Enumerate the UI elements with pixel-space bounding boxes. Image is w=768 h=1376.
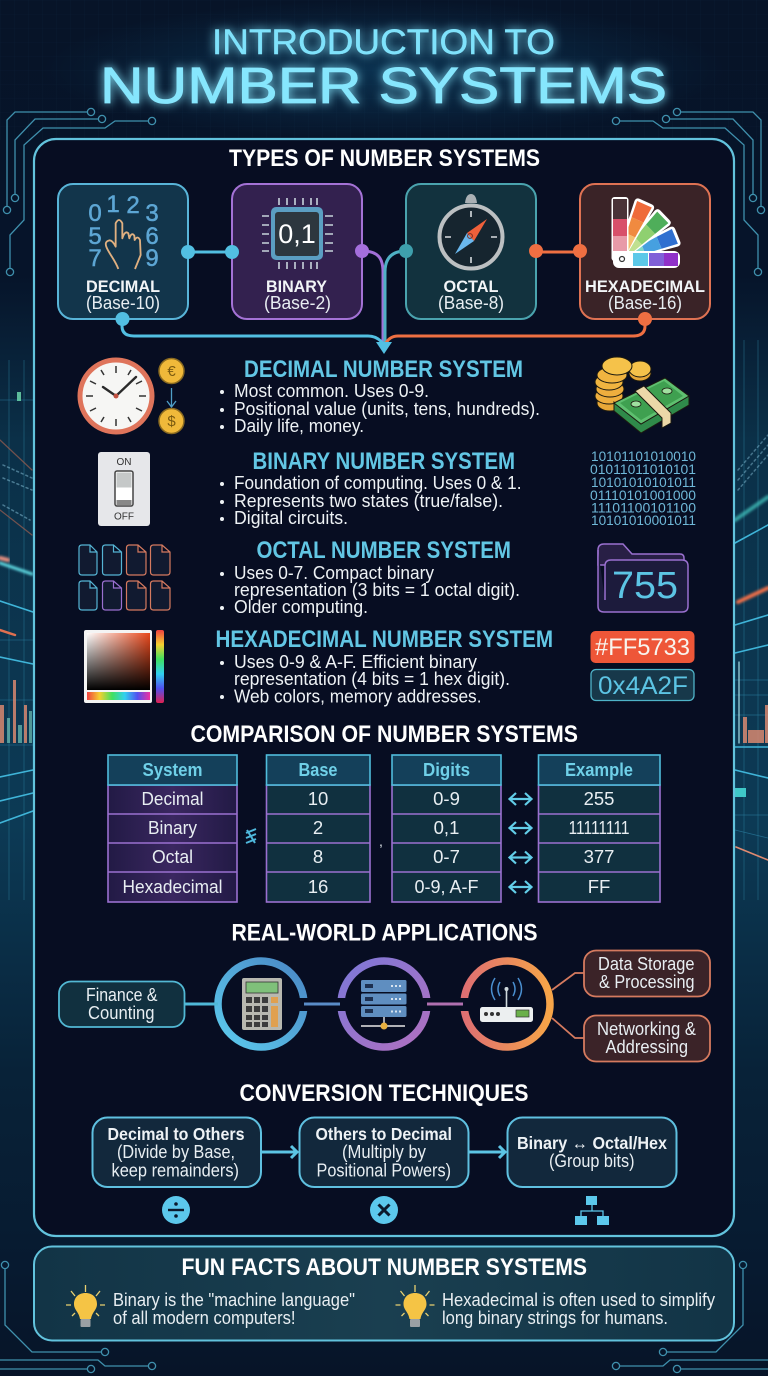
tag: hex colour: #FF5733 bbox=[595, 634, 690, 661]
column: system: Octal bbox=[152, 846, 193, 867]
binary digits block: 10101010101011 bbox=[591, 475, 696, 490]
column: system: Binary bbox=[148, 817, 198, 838]
column: digits: 0-9 bbox=[433, 788, 460, 809]
heading: applications: REAL-WORLD APPLICATIONS bbox=[232, 920, 538, 946]
arrow: step two bbox=[469, 1146, 505, 1158]
connectors: rings and labels bbox=[184, 1002, 463, 1006]
column: system: Hexadecimal bbox=[122, 876, 222, 897]
comma mark: , bbox=[379, 833, 383, 849]
icon: light bulb bbox=[66, 1285, 105, 1327]
title: INTRODUCTION TO bbox=[212, 23, 555, 62]
icon: multiply bbox=[370, 1196, 398, 1224]
column: base: Base bbox=[298, 759, 338, 780]
label: networking: Addressing bbox=[606, 1037, 688, 1057]
conversion flow bbox=[92, 1118, 676, 1225]
section: hexadecimal bbox=[216, 626, 553, 706]
box: others to decimal: Others to Decimal bbox=[316, 1124, 452, 1144]
digits: 9 bbox=[145, 245, 159, 272]
section: binary bbox=[220, 448, 522, 528]
icon: compass bbox=[440, 194, 502, 268]
icon: divide bbox=[162, 1196, 190, 1224]
icon: clock and coins: € bbox=[167, 363, 176, 380]
column: system: Decimal bbox=[142, 788, 204, 809]
section: hexadecimal: HEXADECIMAL NUMBER SYSTEM bbox=[216, 626, 553, 653]
section: binary: Represents two states (true/false). bbox=[234, 490, 503, 511]
icon: on/off switch: OFF bbox=[114, 512, 134, 522]
section: binary: Foundation of computing. Uses 0 & 1. bbox=[234, 472, 522, 493]
fact: binary bbox=[113, 1290, 355, 1328]
box: binary octal hex: (Group bits) bbox=[549, 1151, 634, 1171]
heading: conversion: CONVERSION TECHNIQUES bbox=[240, 1080, 528, 1107]
section: binary: Digital circuits. bbox=[234, 507, 348, 528]
section: binary: BINARY NUMBER SYSTEM bbox=[252, 448, 515, 475]
arrow: down to details bbox=[376, 342, 392, 354]
label: data storage: & Processing bbox=[599, 972, 694, 992]
digits: 5 bbox=[88, 223, 102, 250]
fact: binary: Binary is the "machine language" bbox=[113, 1290, 355, 1310]
section: decimal: Daily life, money. bbox=[234, 415, 364, 436]
binary digits block: 10101101010010 bbox=[591, 449, 696, 464]
icon: coins and cash bbox=[595, 357, 689, 433]
icon: on/off switch bbox=[98, 452, 150, 526]
column: digits: Digits bbox=[423, 759, 470, 780]
digits: 7 bbox=[88, 245, 102, 272]
card: hexadecimal bbox=[580, 184, 710, 319]
binary digits block: 01011011010101 bbox=[590, 462, 696, 477]
label: data storage: Data Storage bbox=[598, 954, 694, 974]
binary digits block: 01110101001000 bbox=[590, 488, 696, 503]
column: example: 377 bbox=[584, 846, 614, 867]
box: others to decimal: (Multiply by bbox=[342, 1142, 426, 1162]
ring: servers bbox=[334, 961, 435, 1047]
column: example: FF bbox=[588, 876, 610, 897]
icon: folder 755 bbox=[598, 544, 688, 612]
digits: 6 bbox=[145, 223, 159, 250]
digits: 0 bbox=[88, 200, 102, 227]
card: binary: BINARY bbox=[266, 277, 328, 296]
digits: 1 bbox=[106, 191, 120, 218]
section: decimal: DECIMAL NUMBER SYSTEM bbox=[244, 356, 523, 383]
section: octal: OCTAL NUMBER SYSTEM bbox=[256, 537, 511, 564]
column: system bbox=[108, 755, 237, 902]
card: binary: (Base-2) bbox=[264, 293, 331, 313]
card: hexadecimal: (Base-16) bbox=[608, 293, 682, 313]
icon: pointing hand bbox=[106, 220, 141, 269]
section: octal bbox=[220, 537, 520, 617]
icon: colour picker bbox=[84, 630, 164, 703]
box: decimal to others: Decimal to Others bbox=[108, 1124, 245, 1144]
column: example: 11111111 bbox=[568, 817, 630, 838]
binary digits block: 10101010001011 bbox=[591, 513, 696, 528]
box: decimal to others bbox=[92, 1118, 261, 1187]
icon: hierarchy bbox=[575, 1196, 609, 1225]
main panel bbox=[34, 139, 734, 1236]
digits: 2 bbox=[126, 192, 140, 219]
connector dots bbox=[116, 244, 652, 326]
heading: comparison: COMPARISON OF NUMBER SYSTEMS bbox=[190, 721, 578, 748]
icon: file grid bbox=[79, 545, 170, 610]
label: networking: Networking & bbox=[597, 1019, 696, 1039]
icon: clock and coins bbox=[80, 358, 184, 434]
fact: hexadecimal bbox=[442, 1290, 715, 1328]
icon: light bulb bbox=[396, 1285, 434, 1327]
digits: 3 bbox=[145, 200, 159, 227]
label: networking bbox=[584, 1016, 710, 1062]
fact: binary: of all modern computers! bbox=[113, 1308, 296, 1328]
column: digits bbox=[392, 755, 501, 902]
box: decimal to others: (Divide by Base, bbox=[117, 1142, 235, 1162]
icon: folder 755: 755 bbox=[612, 565, 678, 607]
comparison table bbox=[108, 755, 660, 902]
column: example: 255 bbox=[584, 788, 614, 809]
card: decimal: DECIMAL bbox=[86, 277, 160, 296]
column: base bbox=[266, 755, 370, 902]
column: base: 16 bbox=[308, 876, 328, 897]
column: base: 8 bbox=[313, 846, 323, 867]
box: binary octal hex bbox=[508, 1118, 676, 1187]
binary digits block: 11101100101100 bbox=[591, 500, 696, 516]
arrow: step one bbox=[261, 1146, 297, 1158]
label: finance: Finance & bbox=[86, 985, 158, 1005]
card: decimal bbox=[58, 184, 188, 319]
section: hexadecimal: Uses 0-9 & A-F. Efficient binary bbox=[234, 651, 478, 672]
icon: router bbox=[480, 978, 533, 1022]
connectors between type cards bbox=[122, 251, 645, 346]
column: digits: 0-7 bbox=[433, 846, 460, 867]
title: NUMBER SYSTEMS bbox=[100, 57, 667, 114]
heading: fun facts: FUN FACTS ABOUT NUMBER SYSTEMS bbox=[182, 1254, 587, 1281]
icon: server rack bbox=[361, 980, 406, 1030]
digits bbox=[88, 191, 159, 272]
ring: calculator bbox=[218, 961, 312, 1047]
card: octal bbox=[406, 184, 536, 319]
card: binary bbox=[232, 184, 362, 319]
heading: types: TYPES OF NUMBER SYSTEMS bbox=[229, 145, 540, 172]
icon: calculator bbox=[242, 978, 282, 1030]
icon: small wave mark bbox=[246, 829, 256, 843]
box: others to decimal: Positional Powers) bbox=[316, 1160, 451, 1180]
label: finance bbox=[59, 982, 184, 1027]
box: binary octal hex: Binary ↔ Octal/Hex bbox=[517, 1133, 667, 1153]
column: digits: 0-9, A-F bbox=[414, 876, 478, 897]
icon: chip: 0,1 bbox=[278, 219, 316, 249]
panel: fun facts bbox=[34, 1246, 734, 1340]
label: data storage bbox=[584, 950, 710, 996]
icon: on/off switch: ON bbox=[116, 457, 132, 468]
tag: hex address: 0x4A2F bbox=[598, 672, 688, 700]
arrows: digits to example bbox=[510, 793, 532, 893]
column: system: System bbox=[142, 759, 202, 780]
section: octal: representation (3 bits = 1 octal digit). bbox=[234, 579, 520, 600]
column: base: 10 bbox=[308, 788, 328, 809]
binary digits block bbox=[590, 449, 696, 528]
section: decimal: Most common. Uses 0-9. bbox=[234, 380, 429, 401]
box: decimal to others: keep remainders) bbox=[112, 1160, 239, 1180]
section: octal: Uses 0-7. Compact binary bbox=[234, 562, 435, 583]
applications diagram bbox=[59, 950, 710, 1062]
column: digits: 0,1 bbox=[434, 817, 459, 838]
column: base: 2 bbox=[313, 817, 323, 838]
fact: hexadecimal: Hexadecimal is often used to simplify bbox=[442, 1290, 715, 1310]
card: octal: OCTAL bbox=[444, 277, 498, 296]
section: octal: Older computing. bbox=[234, 596, 368, 617]
section: hexadecimal: representation (4 bits = 1 hex digit). bbox=[234, 668, 510, 689]
card: decimal: (Base-10) bbox=[86, 293, 160, 313]
card: hexadecimal: HEXADECIMAL bbox=[585, 277, 705, 296]
section: hexadecimal: Web colors, memory addresses. bbox=[234, 686, 482, 706]
label: finance: Counting bbox=[88, 1003, 154, 1023]
box: others to decimal bbox=[300, 1118, 468, 1187]
section: decimal bbox=[220, 356, 540, 436]
icon: clock and coins: $ bbox=[167, 413, 176, 430]
ring: router bbox=[457, 961, 550, 1047]
icon: colour swatch fan bbox=[611, 197, 682, 268]
title bbox=[100, 23, 667, 114]
fact: hexadecimal: long binary strings for humans. bbox=[442, 1308, 668, 1328]
column: example: Example bbox=[565, 759, 633, 780]
section: decimal: Positional value (units, tens, hundreds). bbox=[234, 398, 540, 419]
column: example bbox=[538, 755, 660, 902]
card: octal: (Base-8) bbox=[438, 293, 504, 313]
